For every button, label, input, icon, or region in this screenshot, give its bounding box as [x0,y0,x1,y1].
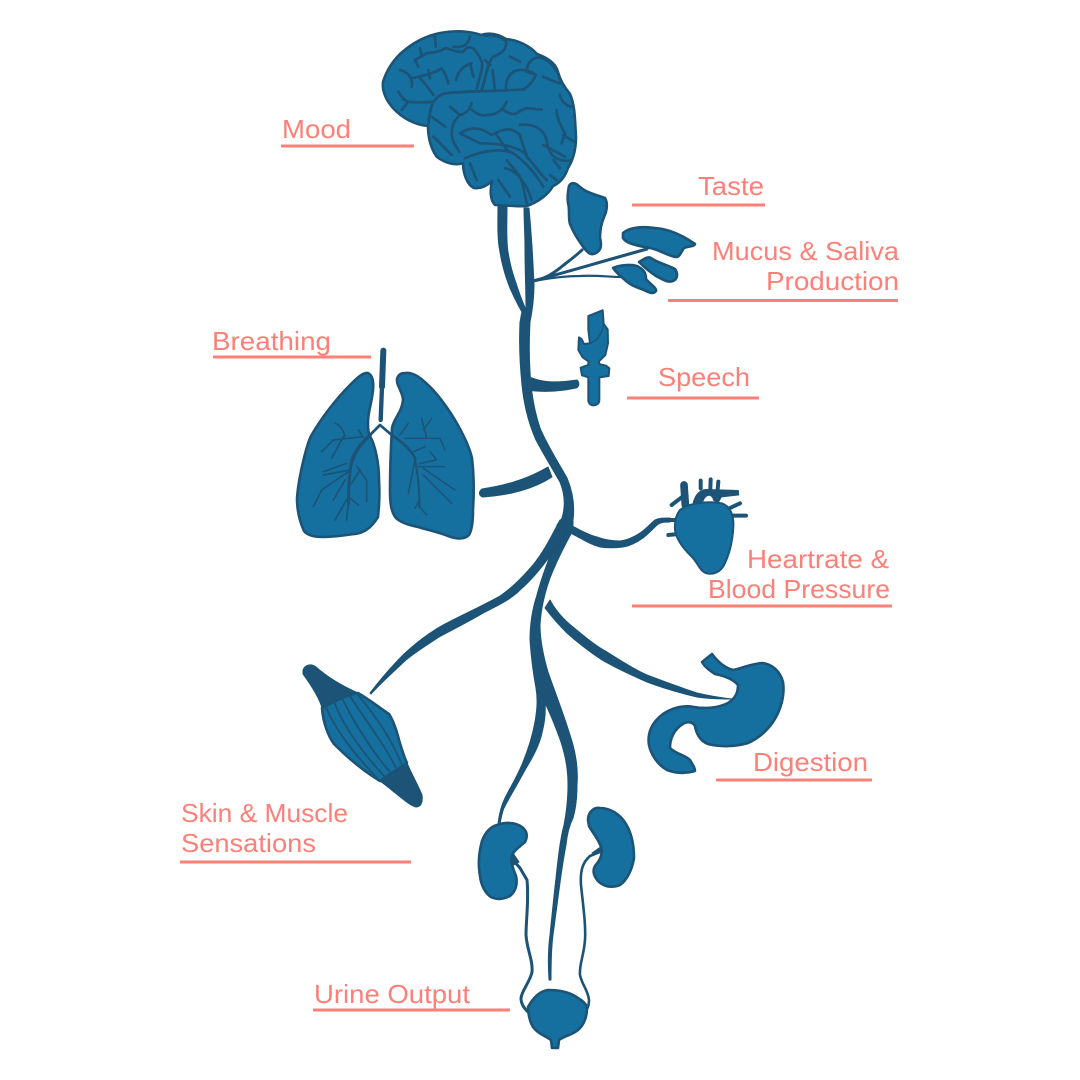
icon: ureters [512,846,602,1012]
label: Heartrate & Blood Pressure [632,544,892,606]
icon: heart [651,479,746,574]
label: Mood [281,114,414,146]
nerve: main vagus trunk and branches [370,205,732,980]
label: Mucus & Saliva Production: Production [766,266,899,296]
label: Taste [632,171,765,205]
label: Heartrate & Blood Pressure: Heartrate & [747,544,889,574]
icon: brain [383,31,576,206]
label: Taste: Taste [698,171,764,201]
icon: right kidney [588,808,634,887]
label: Breathing: Breathing [212,326,331,356]
icon: taste gland [568,183,607,254]
label: Heartrate & Blood Pressure: Blood Pressure [708,574,890,604]
label: Speech: Speech [658,362,750,392]
label: Skin & Muscle Sensations [180,798,411,862]
icon: muscle [303,665,422,807]
icon: salivary gland lower [613,265,656,293]
trachea and bronchi [313,351,455,520]
label: Mood: Mood [282,114,351,144]
icon: lungs [297,351,474,538]
brain folds [398,35,574,203]
label: Skin & Muscle Sensations: Skin & Muscle [181,798,348,828]
icon: bladder [528,990,587,1048]
icon: stomach [649,654,784,773]
icon: left kidney [479,823,527,899]
label: Speech [627,362,759,398]
icon: salivary gland upper [623,227,695,257]
icon: salivary gland middle [639,257,677,282]
label: Mucus & Saliva Production [668,236,900,300]
label: Skin & Muscle Sensations: Sensations [181,828,316,858]
label: Mucus & Saliva Production: Mucus & Saliva [712,236,900,266]
label: Digestion: Digestion [753,747,868,777]
label: Urine Output: Urine Output [314,979,471,1009]
icon: larynx [578,310,609,405]
muscle fibres [325,695,402,779]
